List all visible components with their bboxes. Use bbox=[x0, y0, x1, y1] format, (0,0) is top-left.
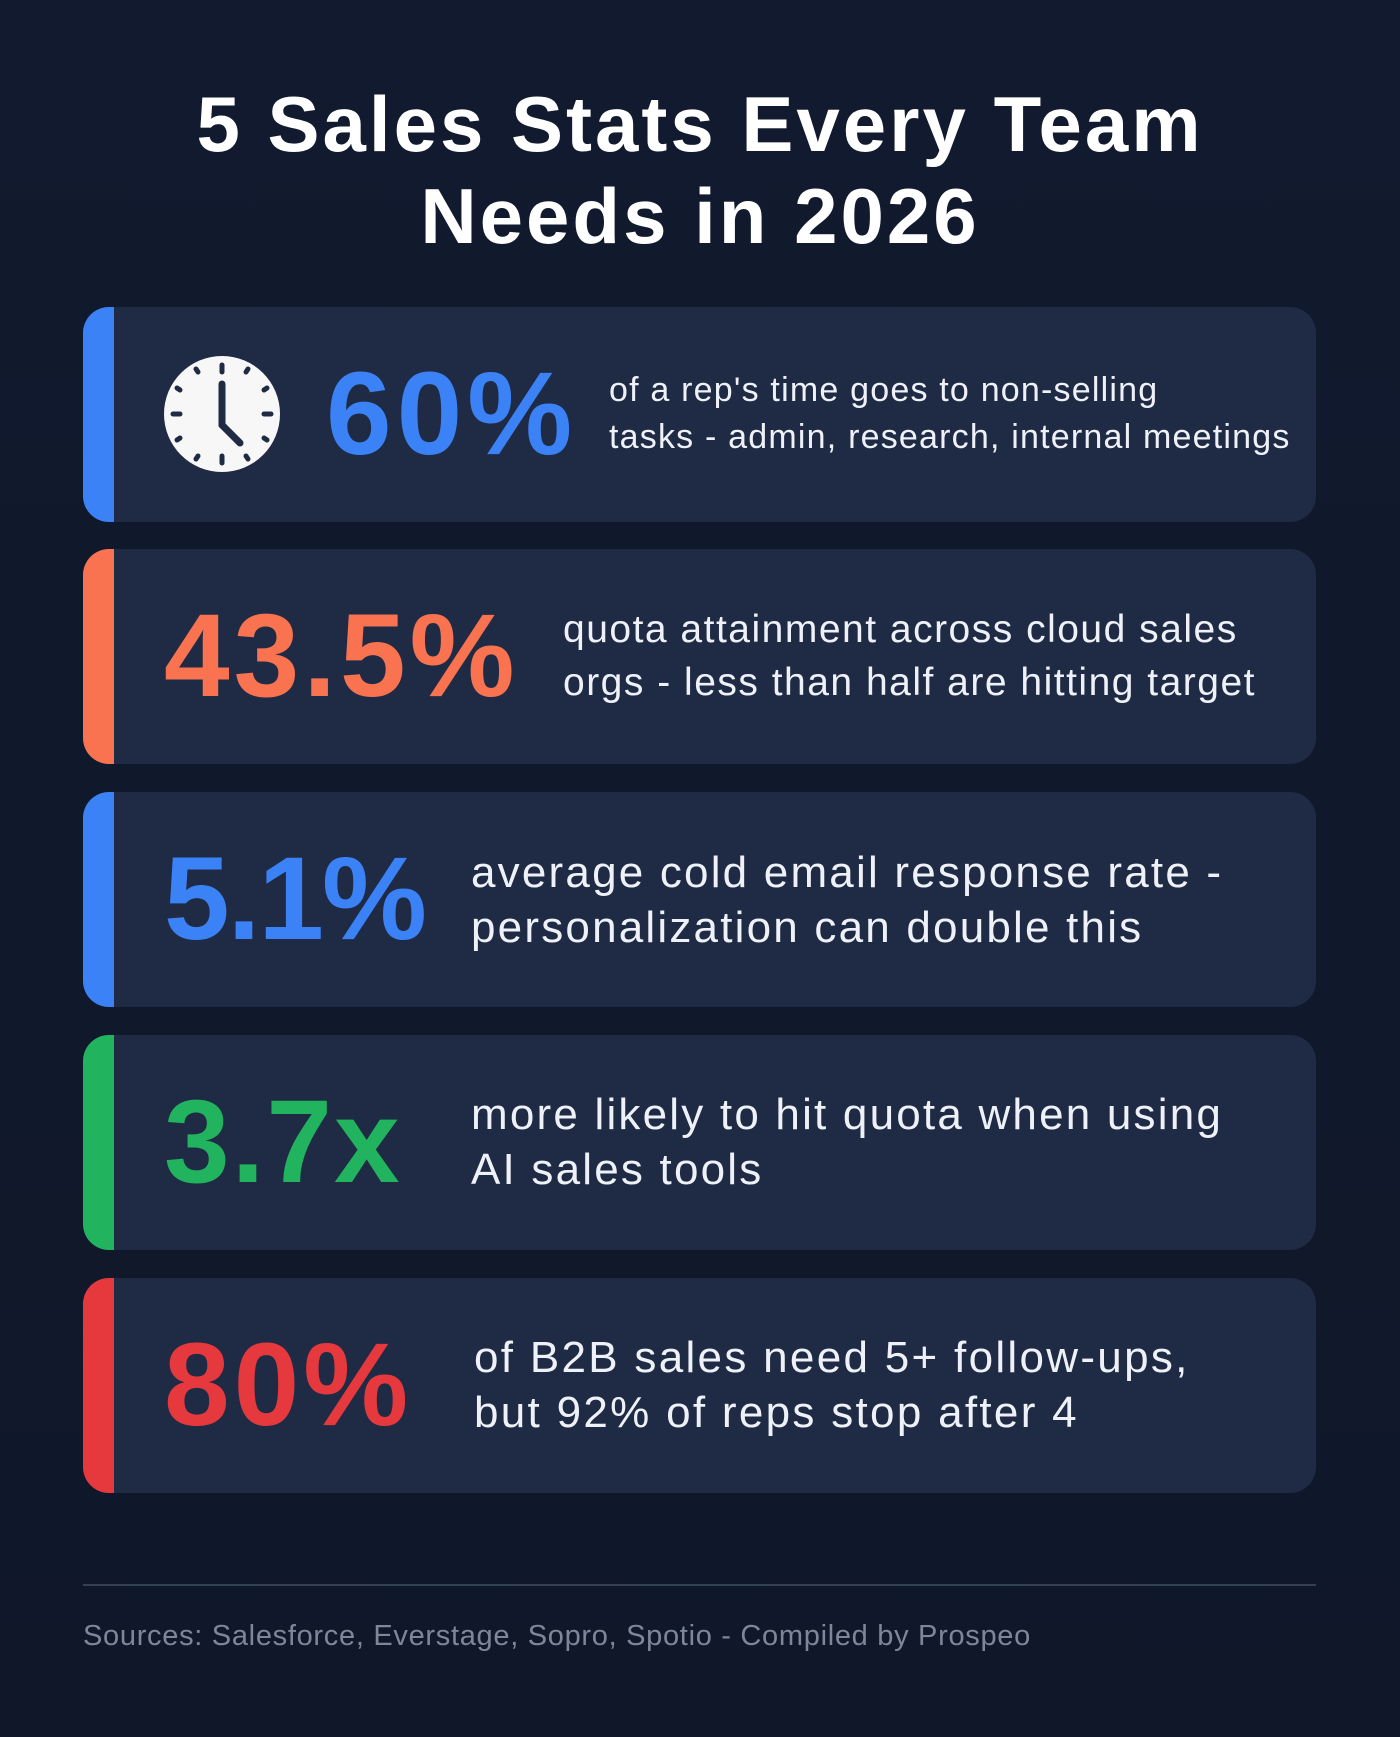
panel: stat 2 bbox=[83, 549, 1316, 764]
title: 5 Sales Stats Every Team bbox=[196, 80, 1204, 168]
stat description: but 92% of reps stop after 4 bbox=[474, 1388, 1079, 1437]
stat description: quota attainment across cloud sales bbox=[563, 608, 1238, 651]
title: Needs in 2026 bbox=[420, 172, 980, 260]
stat description: more likely to hit quota when using bbox=[471, 1090, 1223, 1139]
stat description: average cold email response rate - bbox=[471, 848, 1223, 897]
sources footer: Sources: Salesforce, Everstage, Sopro, Spotio - Compiled by Prospeo bbox=[83, 1620, 1031, 1652]
stat number: 5.1% bbox=[164, 833, 425, 965]
stat description: personalization can double this bbox=[471, 903, 1143, 952]
stat description: of a rep's time goes to non-selling bbox=[609, 371, 1158, 409]
panel: stat 5 bbox=[83, 1278, 1316, 1493]
stat description: of B2B sales need 5+ follow-ups, bbox=[474, 1333, 1190, 1382]
icon: clock bbox=[164, 356, 280, 472]
title bbox=[196, 80, 1204, 260]
stat description bbox=[471, 848, 1223, 952]
stat number: 43.5% bbox=[164, 590, 519, 722]
stat description bbox=[474, 1333, 1190, 1437]
stat description bbox=[609, 371, 1291, 456]
stat description bbox=[471, 1090, 1223, 1194]
stat number: 60% bbox=[326, 348, 577, 480]
stat description: tasks - admin, research, internal meetings bbox=[609, 418, 1291, 456]
stat description: orgs - less than half are hitting target bbox=[563, 661, 1256, 704]
panel: stat 3 bbox=[83, 792, 1316, 1007]
stat description bbox=[563, 608, 1256, 704]
stat number: 80% bbox=[164, 1319, 412, 1451]
stat number: 3.7x bbox=[164, 1076, 402, 1208]
stat description: AI sales tools bbox=[471, 1145, 763, 1194]
panel: stat 4 bbox=[83, 1035, 1316, 1250]
panel: stat 1 bbox=[83, 307, 1316, 522]
